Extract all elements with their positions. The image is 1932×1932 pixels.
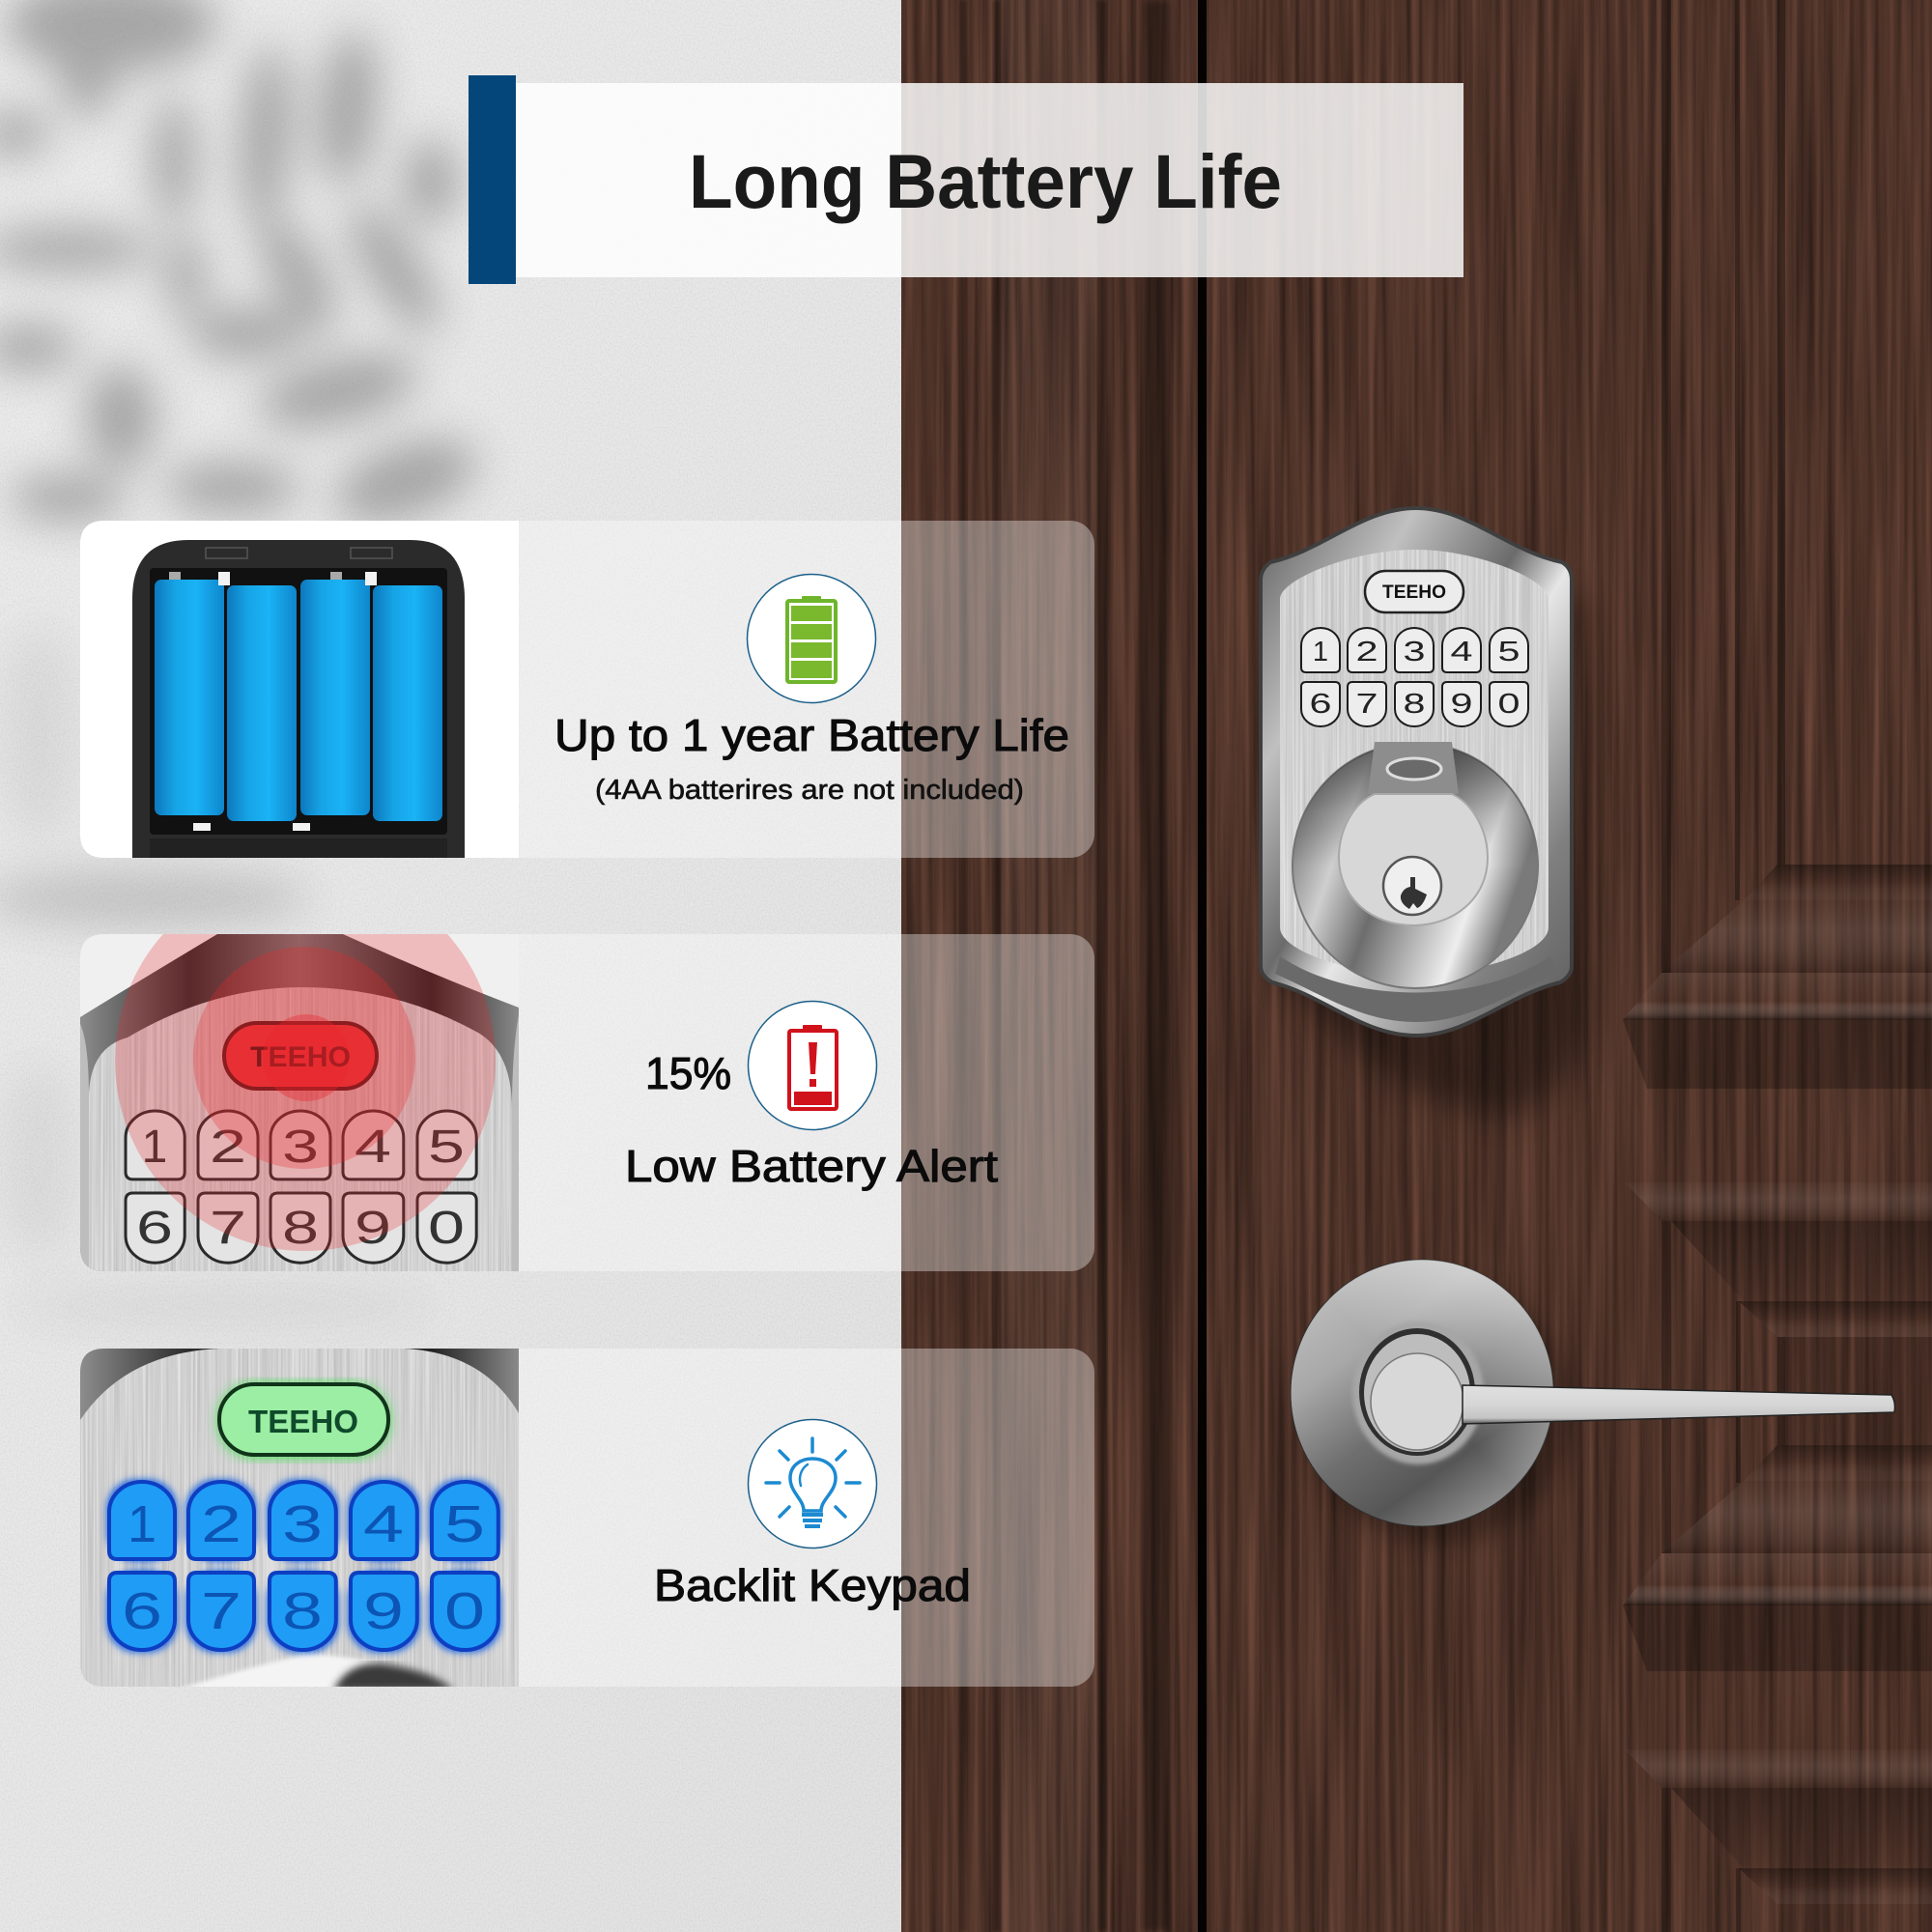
icon: full battery xyxy=(748,574,875,703)
door panel mouldings xyxy=(1623,865,1932,1904)
contact clips xyxy=(169,572,377,831)
outer plate xyxy=(1261,508,1572,1036)
title background xyxy=(516,83,1463,277)
photo: battery compartment xyxy=(80,521,519,869)
sensor window xyxy=(1368,742,1459,794)
blue key digits: 3 xyxy=(282,1495,323,1553)
heading: low battery alert: Low Battery Alert xyxy=(625,1141,998,1191)
wall background xyxy=(0,0,901,1932)
door background xyxy=(901,0,1932,1932)
panel: low battery alert xyxy=(80,870,1094,1275)
lever handle xyxy=(1291,1260,1895,1544)
bezel top shading xyxy=(1293,743,1538,988)
logo pill xyxy=(224,1023,377,1089)
keypad digits: 1 xyxy=(1313,637,1328,668)
blue key digits: 5 xyxy=(444,1495,485,1553)
keypad digits xyxy=(1310,637,1520,720)
door frame shading bands xyxy=(959,0,1170,1932)
leaf shadows xyxy=(0,0,487,1327)
keypad digits: 9 xyxy=(1451,689,1472,720)
photo: illuminated keypad xyxy=(77,1345,522,1690)
lower plate dark band xyxy=(1275,956,1557,1022)
moulding block 4 xyxy=(1625,1749,1932,1904)
key digits: 6 xyxy=(136,1203,173,1254)
brushed plate xyxy=(82,980,517,1275)
inner brushed disc xyxy=(1339,794,1488,925)
blue key digits: 9 xyxy=(363,1582,404,1640)
heading: backlit keypad: Backlit Keypad xyxy=(654,1560,971,1610)
moulding block 1 xyxy=(1623,865,1932,1089)
title accent bar xyxy=(469,75,516,284)
title banner xyxy=(469,75,1463,284)
keypad digits: 4 xyxy=(1451,637,1472,668)
blue key digits: 0 xyxy=(444,1582,485,1640)
panel background xyxy=(80,521,1094,858)
keypad digits: 3 xyxy=(1403,637,1426,668)
key digits xyxy=(139,1130,462,1244)
batteries xyxy=(155,580,442,821)
panel background xyxy=(80,934,1094,1271)
green logo pill xyxy=(219,1384,388,1455)
icon: light bulb xyxy=(748,1420,877,1548)
panel: battery life xyxy=(80,521,1094,869)
key digits: 8 xyxy=(282,1203,319,1254)
wall plaster texture xyxy=(0,0,901,1932)
TEEHO logo pill xyxy=(1365,571,1463,612)
keys xyxy=(126,1111,476,1263)
moulding block 3 xyxy=(1623,1445,1932,1671)
keypad xyxy=(1301,628,1528,726)
photo: red alert logo xyxy=(80,934,519,1271)
key digits: 2 xyxy=(210,1122,246,1173)
green logo text: TEEHO xyxy=(248,1404,358,1439)
chrome arc xyxy=(80,934,519,1271)
logo text: TEEHO xyxy=(250,1041,351,1073)
panel: backlit keypad xyxy=(77,1345,1094,1690)
label: 15%: 15% xyxy=(645,1048,731,1098)
key digits: 9 xyxy=(355,1203,391,1254)
keypad digits: 8 xyxy=(1403,689,1426,720)
lock shadow xyxy=(1275,599,1590,1116)
keypad digits: 5 xyxy=(1497,637,1520,668)
blue key digits xyxy=(122,1495,485,1640)
key digits: 0 xyxy=(428,1203,465,1254)
key digits: 3 xyxy=(282,1122,319,1173)
key glow xyxy=(107,1480,500,1652)
key digits: 7 xyxy=(210,1203,246,1254)
blue key digits: 4 xyxy=(363,1495,404,1553)
moulding block 2 xyxy=(1625,1182,1932,1445)
door gap xyxy=(1198,0,1207,1932)
lever arm xyxy=(1463,1385,1895,1424)
green logo pill glow xyxy=(219,1384,388,1457)
rose highlight xyxy=(1291,1260,1553,1526)
blue key digits: 6 xyxy=(122,1582,162,1640)
note: batteries not included: (4AA batterires are not included) xyxy=(595,775,1024,806)
blue key digits: 8 xyxy=(282,1582,323,1640)
hub ring xyxy=(1352,1321,1484,1464)
blue key digits: 7 xyxy=(201,1582,242,1640)
panel background xyxy=(80,1349,1094,1687)
key digits: 4 xyxy=(355,1122,391,1173)
keypad digits: 0 xyxy=(1497,689,1520,720)
icon: low battery xyxy=(748,1001,877,1130)
rose plate xyxy=(1291,1260,1553,1526)
keypad digits: 6 xyxy=(1310,689,1331,720)
key cylinder xyxy=(1383,857,1441,915)
heading: battery life: Up to 1 year Battery Life xyxy=(554,710,1069,760)
red pulse rings xyxy=(115,870,496,1251)
blue key digits: 2 xyxy=(201,1495,242,1553)
door stile grooves xyxy=(1662,0,1785,1932)
bottom bezel hint xyxy=(174,1654,454,1690)
wood texture xyxy=(901,0,1932,1932)
key digits: 5 xyxy=(428,1122,465,1173)
brushed face plate xyxy=(1275,546,1555,980)
TEEHO logo pill: TEEHO xyxy=(1382,582,1446,603)
deadbolt lock xyxy=(1261,508,1590,1116)
blue keys xyxy=(109,1482,498,1650)
brushed plate xyxy=(77,1345,522,1690)
keypad digits: 7 xyxy=(1356,689,1378,720)
lever shadow xyxy=(1308,1281,1571,1544)
key digits: 1 xyxy=(142,1122,167,1173)
keypad digits: 2 xyxy=(1356,637,1378,668)
chrome bezel ring xyxy=(1293,743,1538,988)
chrome arc xyxy=(80,1349,519,1430)
blue key digits: 1 xyxy=(128,1495,156,1553)
title text: Long Battery Life xyxy=(689,138,1282,224)
